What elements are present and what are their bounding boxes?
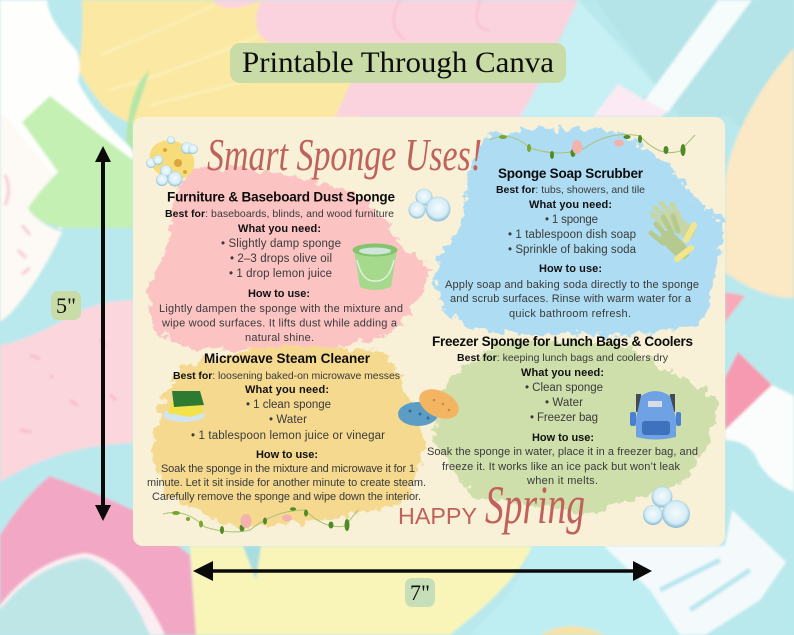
panel: furniture and baseboard dust sponge: • Slightly damp sponge	[221, 238, 341, 250]
yellow glove bottom	[190, 546, 532, 635]
teal towel	[595, 0, 794, 190]
icon: blue and orange sponges	[398, 383, 464, 426]
white spray bottle	[0, 0, 133, 230]
panel: freezer sponge for lunch bags and coolers: How to use:	[532, 432, 594, 444]
panel: furniture and baseboard dust sponge: natural shine.	[245, 332, 314, 344]
panel: freezer sponge for lunch bags and coolers: freeze it. It works like an ice pack but won’t leak	[442, 461, 680, 473]
panel: furniture and baseboard dust sponge: Lightly dampen the sponge with the mixture and	[159, 303, 403, 315]
icon: green rubber gloves	[651, 203, 694, 259]
vine garland top right	[490, 134, 695, 159]
main card	[133, 117, 725, 546]
width label 7 inch: 7"	[410, 580, 430, 605]
closing text: happy spring: HAPPY	[398, 503, 477, 529]
closing text: happy spring: Spring	[485, 475, 585, 535]
panel: furniture and baseboard dust sponge: How to use:	[248, 288, 310, 300]
panel: freezer sponge for lunch bags and coolers: Freezer Sponge for Lunch Bags & Coolers	[432, 334, 693, 349]
panel: microwave steam cleaner: Microwave Steam Cleaner	[204, 351, 371, 366]
panel: sponge soap scrubber: Sponge Soap Scrubber	[498, 166, 644, 181]
icon: soap bubbles lower	[643, 486, 690, 528]
icon: green bucket	[352, 244, 398, 290]
panel: freezer sponge for lunch bags and coolers	[427, 334, 718, 514]
panel: furniture and baseboard dust sponge: wipe wood surfaces. It lifts dust while adding a	[161, 318, 398, 330]
height label 5 inch	[51, 291, 81, 320]
icon: yellow sponge with bubbles	[143, 133, 201, 187]
panel: sponge soap scrubber: • Sprinkle of baking soda	[508, 244, 637, 256]
panel: furniture and baseboard dust sponge: • 1 drop lemon juice	[229, 268, 332, 280]
panel: sponge soap scrubber: Best for: tubs, showers, and tile	[496, 184, 645, 196]
right bottle collar	[725, 352, 772, 430]
title pill: printable through canva: Printable Through Canva	[242, 46, 554, 79]
icon: soap bubbles upper	[408, 188, 450, 222]
white brush bristles bottom right	[604, 510, 786, 635]
panel: sponge soap scrubber: • 1 sponge	[545, 214, 598, 226]
panel: sponge soap scrubber: Apply soap and baking soda directly to the sponge	[445, 279, 699, 291]
panel: freezer sponge for lunch bags and coolers: Soak the sponge in water, place it in a freezer bag, and	[427, 446, 698, 458]
icon: green sponge with foam	[163, 391, 205, 422]
white scrub brush handle	[645, 0, 752, 112]
panel: furniture and baseboard dust sponge	[146, 168, 432, 350]
panel: furniture and baseboard dust sponge: Furniture & Baseboard Dust Sponge	[167, 190, 395, 204]
patterned white cloth	[0, 112, 62, 322]
cream sponge right	[725, 48, 794, 298]
panel: sponge soap scrubber: quick bathroom refresh.	[509, 308, 631, 320]
icon: blue backpack	[630, 391, 681, 440]
panel: furniture and baseboard dust sponge: Best for: baseboards, blinds, and wood furniture	[165, 208, 394, 220]
deep pink cloth	[0, 476, 196, 635]
closing text: happy spring	[398, 475, 585, 535]
panel: furniture and baseboard dust sponge: • 2–3 drops olive oil	[230, 253, 332, 265]
height label 5 inch: 5"	[56, 293, 76, 318]
panel: freezer sponge for lunch bags and coolers: • Water	[545, 397, 583, 409]
panel: freezer sponge for lunch bags and coolers: What you need:	[521, 367, 604, 379]
light teal wedge	[520, 0, 660, 117]
panel: microwave steam cleaner	[147, 346, 426, 528]
panel: microwave steam cleaner: Soak the sponge in the mixture and microwave it for 1	[161, 463, 415, 475]
panel: microwave steam cleaner: • Water	[269, 414, 307, 426]
panel: furniture and baseboard dust sponge: What you need:	[238, 223, 321, 235]
width arrow	[193, 561, 652, 581]
panel: microwave steam cleaner: How to use:	[256, 449, 318, 461]
panel: sponge soap scrubber: How to use:	[539, 263, 602, 275]
yellow towel	[78, 0, 360, 125]
teal sponge bottom left	[0, 553, 165, 635]
panel: sponge soap scrubber: What you need:	[529, 199, 612, 211]
panel: freezer sponge for lunch bags and coolers: • Clean sponge	[525, 382, 603, 394]
panel: microwave steam cleaner: Carefully remove the sponge and wipe down the interior.	[152, 491, 421, 503]
panel: freezer sponge for lunch bags and coolers: • Freezer bag	[530, 412, 598, 424]
heading: smart sponge uses: Smart Sponge Uses!	[207, 129, 482, 180]
panel: freezer sponge for lunch bags and coolers: when it melts.	[526, 475, 598, 487]
panel: sponge soap scrubber	[436, 128, 726, 336]
pink rubber glove	[212, 0, 578, 117]
pink sponge left	[0, 300, 133, 482]
panel: microwave steam cleaner: Best for: loosening baked-on microwave messes	[173, 370, 400, 382]
panel: freezer sponge for lunch bags and coolers: Best for: keeping lunch bags and coolers dry	[457, 352, 669, 364]
panel: sponge soap scrubber: • 1 tablespoon dish soap	[508, 229, 636, 241]
width label 7 inch	[405, 578, 435, 607]
green spray nozzle	[22, 96, 133, 228]
panel: microwave steam cleaner: • 1 tablespoon lemon juice or vinegar	[191, 430, 385, 442]
panel: microwave steam cleaner: • 1 clean sponge	[246, 399, 331, 411]
vine garland bottom left	[163, 507, 358, 534]
height arrow	[95, 146, 111, 521]
panel: microwave steam cleaner: minute. Let it sit inside for another minute to create steam.	[147, 477, 426, 489]
panel: sponge soap scrubber: and scrub surfaces. Rinse with warm water for a	[450, 293, 692, 305]
panel: microwave steam cleaner: What you need:	[245, 384, 329, 396]
